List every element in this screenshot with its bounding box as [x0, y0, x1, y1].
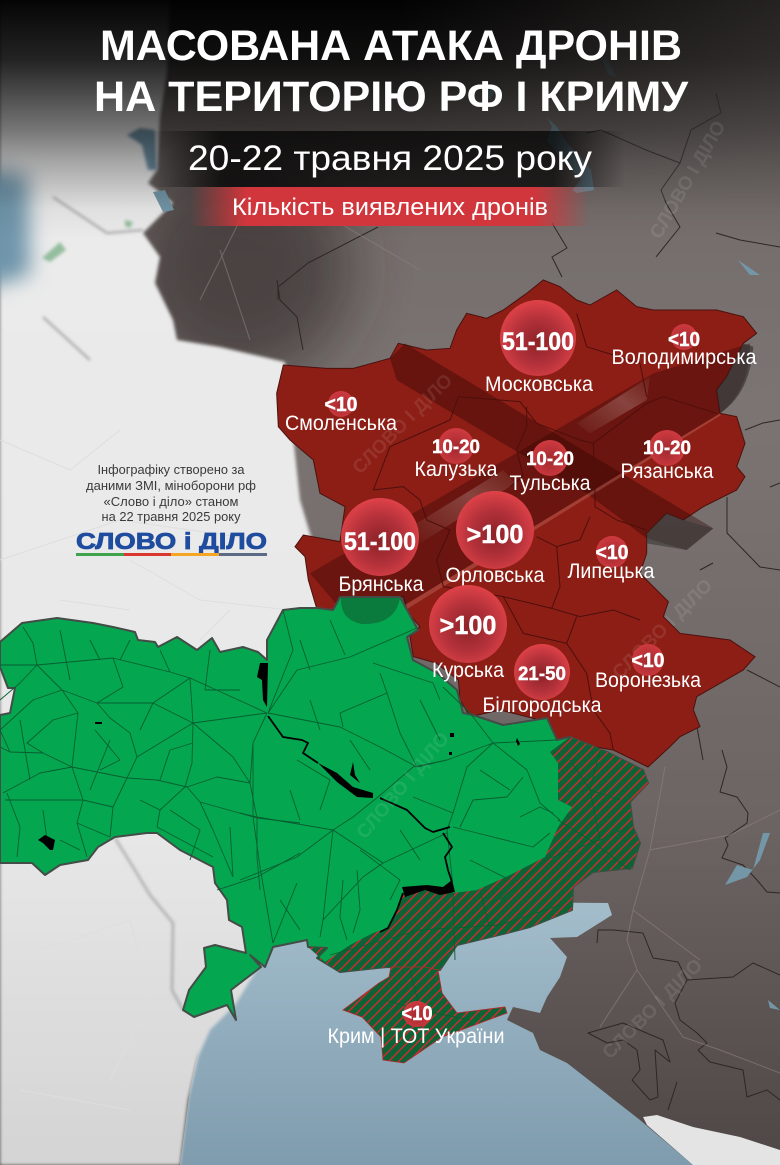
region: Брянська: Брянська	[338, 573, 424, 596]
georgia land	[643, 1115, 780, 1165]
region: Рязанська	[620, 430, 714, 483]
title line 2: НА ТЕРИТОРІЮ РФ І КРИМУ	[94, 73, 689, 121]
darker northern overlap	[341, 598, 400, 624]
Crimea	[343, 967, 507, 1063]
region: Крим	[328, 1001, 504, 1048]
map: Russian border regions	[277, 280, 757, 767]
region: Калузька: 10-20	[432, 437, 480, 458]
forest patch	[42, 220, 133, 262]
note: «Слово і діло» станом	[104, 495, 238, 509]
region: Білгородська: 21-50	[518, 664, 566, 685]
region: Крим: <10	[402, 1003, 432, 1025]
europe faint lines	[0, 430, 290, 1110]
region: Тульська	[510, 440, 591, 495]
note: даними ЗМІ, міноборони рф	[86, 479, 256, 493]
region: Рязанська: Рязанська	[620, 460, 714, 483]
subtitle panel	[190, 187, 590, 226]
roads	[0, 627, 300, 890]
region: Смоленська: <10	[324, 394, 358, 416]
region: Липецька: <10	[596, 542, 628, 564]
title line 1: МАСОВАНА АТАКА ДРОНІВ	[100, 22, 682, 70]
watermark text on Russia: СЛОВО І ДІЛО	[349, 370, 457, 479]
sea	[180, 900, 693, 1165]
roads in occupied territory	[330, 750, 632, 1020]
title	[94, 22, 689, 121]
region: Воронезька: Воронезька	[595, 669, 701, 692]
grey band tip outside region	[647, 513, 713, 550]
russia region borders	[277, 93, 780, 1110]
region: Тульська: 10-20	[526, 449, 574, 470]
region: Московська: Московська	[485, 373, 593, 396]
small black dots	[95, 722, 520, 755]
Dnipro river	[268, 716, 452, 932]
light streak lower	[397, 413, 721, 613]
region: Смоленська: Смоленська	[285, 412, 397, 435]
subtitle: Кількість виявлених дронів	[232, 194, 548, 221]
date: 20-22 травня 2025 року	[188, 139, 593, 178]
region: Володимирська: Володимирська	[612, 346, 757, 369]
lighter top right	[400, 0, 780, 200]
map: Ukraine	[0, 597, 648, 1063]
occupied territory hatch	[308, 737, 648, 972]
dark band 2	[310, 343, 750, 610]
region: Московська: 51-100	[502, 328, 574, 356]
region: Калузька: Калузька	[414, 458, 498, 481]
light streak upper	[577, 377, 650, 433]
note: Інфографіку створено за	[98, 463, 245, 477]
region: Смоленська	[285, 391, 397, 435]
watermark text south east: СЛОВО І ДІЛО	[599, 955, 707, 1064]
region: Курська: Курська	[432, 659, 504, 682]
region: Рязанська: 10-20	[643, 438, 691, 459]
light streak middle	[417, 470, 515, 543]
dark band 1	[390, 343, 713, 550]
region: Крим: Крим | ТОТ України	[328, 1025, 504, 1048]
region: Тульська: Тульська	[510, 472, 591, 495]
region: Воронезька	[595, 644, 701, 692]
lake near the border	[127, 128, 157, 170]
note: на 22 травня 2025 року	[102, 510, 241, 524]
watermarks	[349, 118, 730, 1064]
dark top vignette	[0, 0, 780, 240]
region: Брянська: 51-100	[344, 528, 416, 556]
date panel	[150, 131, 625, 187]
region borders	[373, 313, 717, 750]
europe land	[0, 0, 400, 1165]
region: Брянська	[338, 498, 424, 596]
watermark text Ukraine: СЛОВО І ДІЛО	[353, 728, 454, 843]
Dnipro reservoirs	[38, 663, 455, 897]
regions fill	[277, 280, 757, 767]
region: Білгородська: Білгородська	[482, 694, 602, 717]
Ukraine territory	[0, 597, 648, 1020]
europe borders	[43, 197, 183, 1010]
region: Курська: >100	[440, 610, 496, 640]
region: Білгородська	[482, 644, 602, 717]
region: Калузька	[414, 428, 498, 481]
baltic sea shading	[0, 165, 30, 295]
region: Орловська	[446, 491, 545, 587]
region: Володимирська	[612, 324, 757, 369]
region: Володимирська: <10	[668, 329, 700, 351]
roads east	[240, 610, 560, 943]
region: Курська	[429, 585, 507, 682]
lakes	[153, 57, 780, 1010]
region: Московська	[485, 300, 593, 396]
watermark text upper right: СЛОВО І ДІЛО	[646, 118, 730, 242]
western Russia shadow	[130, 160, 350, 380]
grey curved tip outside region	[717, 343, 753, 413]
region: Орловська: Орловська	[446, 564, 545, 587]
region: Липецька	[568, 536, 655, 583]
region: Орловська: >100	[466, 519, 524, 549]
region: Липецька: Липецька	[568, 560, 655, 583]
watermark text right: СЛОВО І ДІЛО	[609, 575, 717, 684]
logo: СЛОВО і ДІЛО	[76, 528, 267, 554]
russia faint roads	[200, 200, 780, 1073]
note	[86, 463, 256, 524]
region: Воронезька: <10	[632, 650, 664, 672]
